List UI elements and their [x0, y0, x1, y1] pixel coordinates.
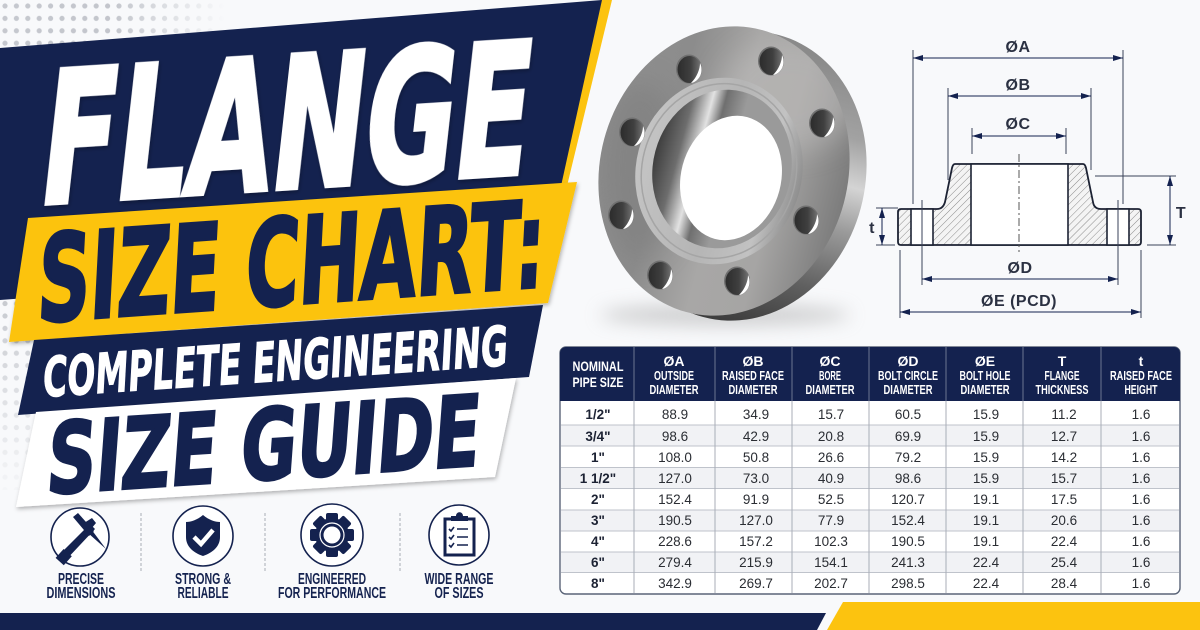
dimension labels: ØE (PCD): [981, 293, 1057, 310]
table values: 11.2: [1051, 407, 1077, 422]
table values: 127.0: [658, 471, 692, 486]
table values: 22.4: [1051, 534, 1078, 549]
table header: ØC: [820, 353, 840, 369]
dimension labels: T: [1176, 205, 1186, 222]
table values: 15.7: [1051, 471, 1077, 486]
table header: FLANGE: [1044, 368, 1080, 383]
table values: 2": [591, 492, 605, 507]
table header: BORE: [819, 368, 841, 383]
table values: 12.7: [1051, 429, 1077, 444]
table values: 1 1/2": [580, 471, 616, 486]
icon: caliper: [51, 508, 109, 566]
table values: 127.0: [739, 513, 773, 528]
icon: gear: [301, 504, 363, 566]
table values: 8": [591, 576, 605, 591]
dimension labels: [869, 39, 1186, 310]
label: wide range of sizes: WIDE RANGE: [424, 571, 494, 588]
table values: 73.0: [743, 471, 769, 486]
white subtitle band: SIZE GUIDE: SIZE GUIDE: [43, 375, 485, 518]
table values: 279.4: [658, 555, 692, 570]
label: precise dimensions: [46, 571, 116, 602]
size table: [560, 347, 1180, 594]
table header: DIAMETER: [884, 382, 933, 397]
table values: 19.1: [973, 492, 999, 507]
table values: 1.6: [1132, 513, 1150, 528]
feature row: [46, 504, 494, 602]
table values: 154.1: [814, 555, 848, 570]
dimension labels: ØB: [1006, 77, 1030, 94]
table values: 152.4: [891, 513, 925, 528]
yellow title band: SIZE CHART: [9, 175, 577, 351]
table values: 4": [591, 534, 605, 549]
table header: BOLT CIRCLE: [878, 368, 938, 383]
label: engineered for performance: [278, 571, 386, 602]
feature: engineered for performance: [278, 504, 386, 602]
table values: 120.7: [891, 492, 925, 507]
table values: 3": [591, 513, 605, 528]
table values: 228.6: [658, 534, 692, 549]
table values: 1.6: [1132, 492, 1150, 507]
table values: 17.5: [1051, 492, 1077, 507]
table values: 60.5: [895, 407, 921, 422]
label: precise dimensions: DIMENSIONS: [46, 585, 116, 602]
table values: 52.5: [818, 492, 844, 507]
title banner: navy background with FLANGE: [0, 0, 612, 300]
feature: wide range of sizes: [424, 505, 494, 602]
table values: 19.1: [973, 534, 999, 549]
table values: 22.4: [973, 555, 1000, 570]
table values: 26.6: [818, 450, 844, 465]
table values: 1.6: [1132, 429, 1150, 444]
table values: 50.8: [743, 450, 769, 465]
table values: 108.0: [658, 450, 692, 465]
table values: 1.6: [1132, 407, 1150, 422]
table values: 42.9: [743, 429, 769, 444]
table values: 25.4: [1051, 555, 1078, 570]
feature: strong and reliable: [173, 506, 233, 602]
table values: 91.9: [743, 492, 769, 507]
table header: T: [1058, 353, 1067, 369]
label: engineered for performance: ENGINEERED: [298, 571, 366, 588]
table values: 1.6: [1132, 471, 1150, 486]
table values: 69.9: [895, 429, 921, 444]
label: precise dimensions: PRECISE: [58, 571, 104, 588]
feature: precise dimensions: [46, 508, 116, 602]
table rows background: [561, 425, 1179, 572]
table values: 157.2: [739, 534, 773, 549]
dimension lines: [876, 50, 1176, 318]
table header: ØD: [898, 353, 918, 369]
table header: ØE: [975, 353, 995, 369]
table header: DIAMETER: [728, 382, 778, 397]
white subtitle band: SIZE GUIDE: [16, 375, 516, 518]
label: engineered for performance: FOR PERFORMANCE: [278, 585, 386, 602]
flange photo: [598, 26, 867, 334]
table header: ØA: [664, 353, 684, 369]
table values: 34.9: [743, 407, 769, 422]
yellow title band: SIZE CHART: SIZE CHART:: [34, 175, 549, 351]
navy subtitle band: COMPLETE ENGINEERING: [18, 305, 543, 415]
table values: 269.7: [739, 576, 773, 591]
table header: DIAMETER: [960, 382, 1010, 397]
table values: 1.6: [1132, 450, 1150, 465]
table values: 98.6: [662, 429, 688, 444]
table header: ØB: [742, 353, 764, 369]
table values: 40.9: [818, 471, 844, 486]
table values: 342.9: [658, 576, 692, 591]
technical drawing: flange cross-section with dimensions: [869, 39, 1186, 318]
table header: DIAMETER: [806, 382, 855, 397]
table values: 190.5: [891, 534, 925, 549]
table values: 88.9: [662, 407, 688, 422]
table values: 20.6: [1051, 513, 1077, 528]
table header: PIPE SIZE: [572, 374, 624, 390]
label: wide range of sizes: [424, 571, 494, 602]
table header: [560, 347, 1180, 401]
table values: 3/4": [585, 429, 611, 444]
table values: 241.3: [891, 555, 925, 570]
table header: RAISED FACE: [1110, 368, 1172, 383]
icon: clipboard: [429, 505, 489, 565]
table values: 98.6: [895, 471, 921, 486]
dimension labels: ØC: [1006, 116, 1030, 133]
table values: 15.9: [973, 471, 999, 486]
table values: 20.8: [818, 429, 844, 444]
navy subtitle band: COMPLETE ENGINEERING: COMPLETE ENGINEERING: [41, 315, 510, 411]
table values: 6": [591, 555, 605, 570]
table values: 28.4: [1051, 576, 1078, 591]
table header: t: [1139, 353, 1144, 369]
footer bar: [0, 602, 1200, 630]
table values: 77.9: [818, 513, 844, 528]
table values: 1.6: [1132, 576, 1150, 591]
dimension labels: t: [869, 220, 875, 237]
table values: 298.5: [891, 576, 925, 591]
table values: 102.3: [814, 534, 848, 549]
dimension labels: ØD: [1008, 260, 1032, 277]
cross-section: [898, 154, 1141, 252]
table values: 202.7: [814, 576, 848, 591]
table header: BOLT HOLE: [960, 368, 1011, 383]
table header: DIAMETER: [650, 382, 699, 397]
table values: 15.9: [973, 407, 999, 422]
table header: OUTSIDE: [654, 368, 694, 383]
label: wide range of sizes: OF SIZES: [434, 585, 484, 602]
table header: RAISED FACE: [722, 368, 784, 383]
table header: HEIGHT: [1124, 382, 1158, 397]
table values: 19.1: [973, 513, 999, 528]
bolt holes: [608, 46, 835, 296]
table values: [580, 407, 1150, 591]
label: strong and reliable: [175, 571, 231, 602]
table values: 190.5: [658, 513, 692, 528]
icon: shield: [173, 506, 233, 566]
table values: 15.9: [973, 450, 999, 465]
table values: 1/2": [585, 407, 611, 422]
table header: NOMINAL: [572, 358, 624, 374]
table values: 15.9: [973, 429, 999, 444]
table values: 215.9: [739, 555, 773, 570]
table values: 1.6: [1132, 555, 1150, 570]
table values: 22.4: [973, 576, 1000, 591]
table values: 1.6: [1132, 534, 1150, 549]
label: strong and reliable: RELIABLE: [178, 585, 228, 602]
dimension labels: ØA: [1006, 39, 1030, 56]
table values: 14.2: [1051, 450, 1077, 465]
table header: THICKNESS: [1036, 382, 1089, 397]
table values: 15.7: [818, 407, 844, 422]
label: strong and reliable: STRONG &: [175, 571, 231, 588]
table values: 1": [591, 450, 605, 465]
table values: 79.2: [895, 450, 921, 465]
table values: 152.4: [658, 492, 692, 507]
